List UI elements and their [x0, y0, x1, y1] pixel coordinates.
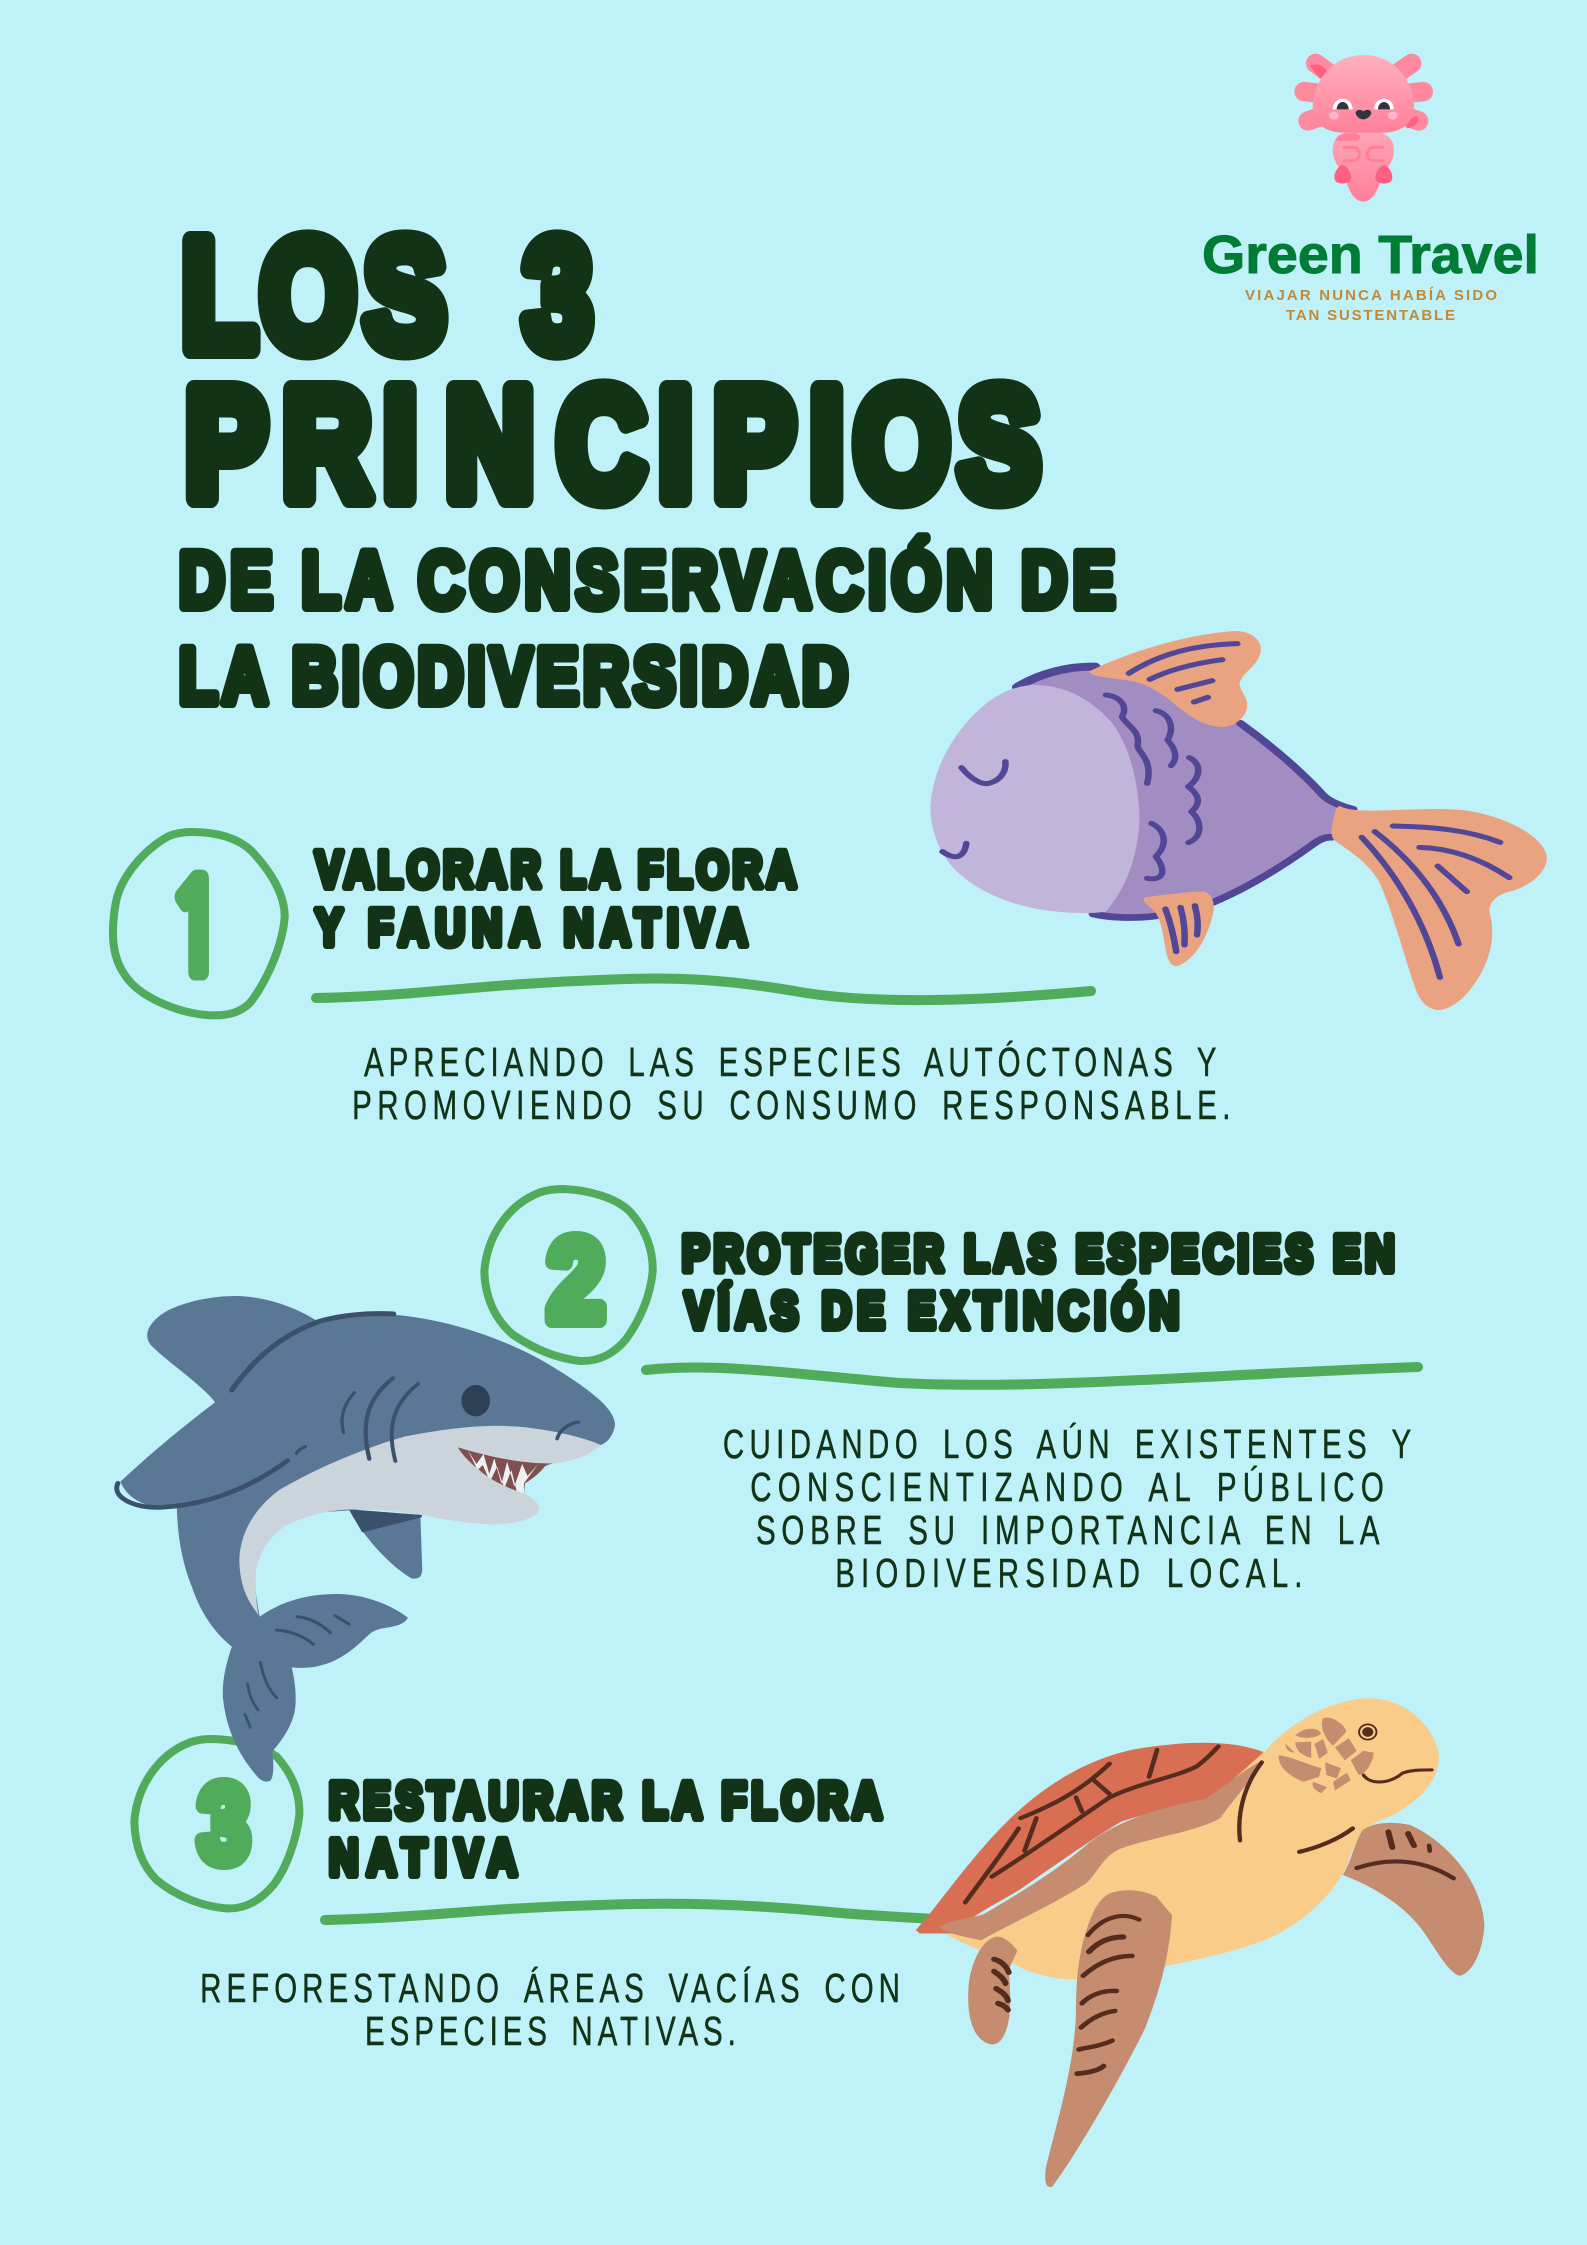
tagline: TAN SUSTENTABLE [1286, 307, 1455, 324]
icon: shark [117, 1296, 615, 1782]
heading 2: VÍAS DE EXTINCIÓN [685, 1282, 1179, 1339]
description 2 [723, 1421, 1411, 1596]
heading 1 [315, 841, 796, 956]
title [179, 207, 1115, 721]
number badge 2 [484, 1189, 653, 1361]
subtitle [179, 535, 1115, 721]
description 1: PROMOVIENDO SU CONSUMO RESPONSABLE. [352, 1082, 1230, 1128]
description 3: REFORESTANDO ÁREAS VACÍAS CON [200, 1965, 900, 2011]
description 2: SOBRE SU IMPORTANCIA EN LA [756, 1507, 1380, 1553]
brand name: Green Travel [1202, 225, 1539, 285]
divider line 1 [316, 978, 1091, 1000]
number badge 2: 2 [548, 1215, 604, 1345]
number badge 3: 3 [199, 1763, 249, 1885]
description 3: ESPECIES NATIVAS. [365, 2008, 736, 2054]
heading 3 [329, 1772, 882, 1886]
heading 2: PROTEGER LAS ESPECIES EN [682, 1225, 1395, 1282]
divider line 3 [325, 1904, 935, 1920]
description 2: CONSCIENTIZANDO AL PÚBLICO [750, 1464, 1384, 1510]
logo: Green Travel [1202, 55, 1539, 324]
panel: principle 1 [113, 832, 1230, 1128]
subtitle: DE LA CONSERVACIÓN DE [179, 535, 1115, 625]
description 2: BIODIVERSIDAD LOCAL. [835, 1550, 1302, 1596]
panel: principle 3 [134, 1739, 935, 2054]
icon: axolotl mascot [1304, 55, 1423, 202]
description 2: CUIDANDO LOS AÚN EXISTENTES Y [723, 1421, 1411, 1467]
panel: principle 2 [484, 1189, 1418, 1596]
heading 1: VALORAR LA FLORA [315, 841, 796, 898]
subtitle: LA BIODIVERSIDAD [179, 632, 848, 721]
number badge 1 [113, 832, 285, 1015]
divider line 2 [646, 1367, 1418, 1385]
heading 1: Y FAUNA NATIVA [315, 899, 747, 956]
heading 3: RESTAURAR LA FLORA [329, 1772, 882, 1829]
number badge 3 [134, 1739, 299, 1908]
description 1 [352, 1039, 1230, 1128]
heading 3: NATIVA [329, 1829, 517, 1886]
description 1: APRECIANDO LAS ESPECIES AUTÓCTONAS Y [364, 1039, 1217, 1085]
title line: los 3: LOS 3 [182, 207, 592, 382]
description 3 [200, 1965, 900, 2054]
icon: fish [930, 631, 1547, 1010]
tagline [1245, 287, 1497, 324]
icon: sea turtle [916, 1698, 1484, 2187]
number badge 1: 1 [168, 867, 225, 992]
heading 2 [682, 1225, 1395, 1339]
tagline: VIAJAR NUNCA HABÍA SIDO [1245, 287, 1497, 304]
title line: principios: PRINCIPIOS [185, 356, 1040, 531]
